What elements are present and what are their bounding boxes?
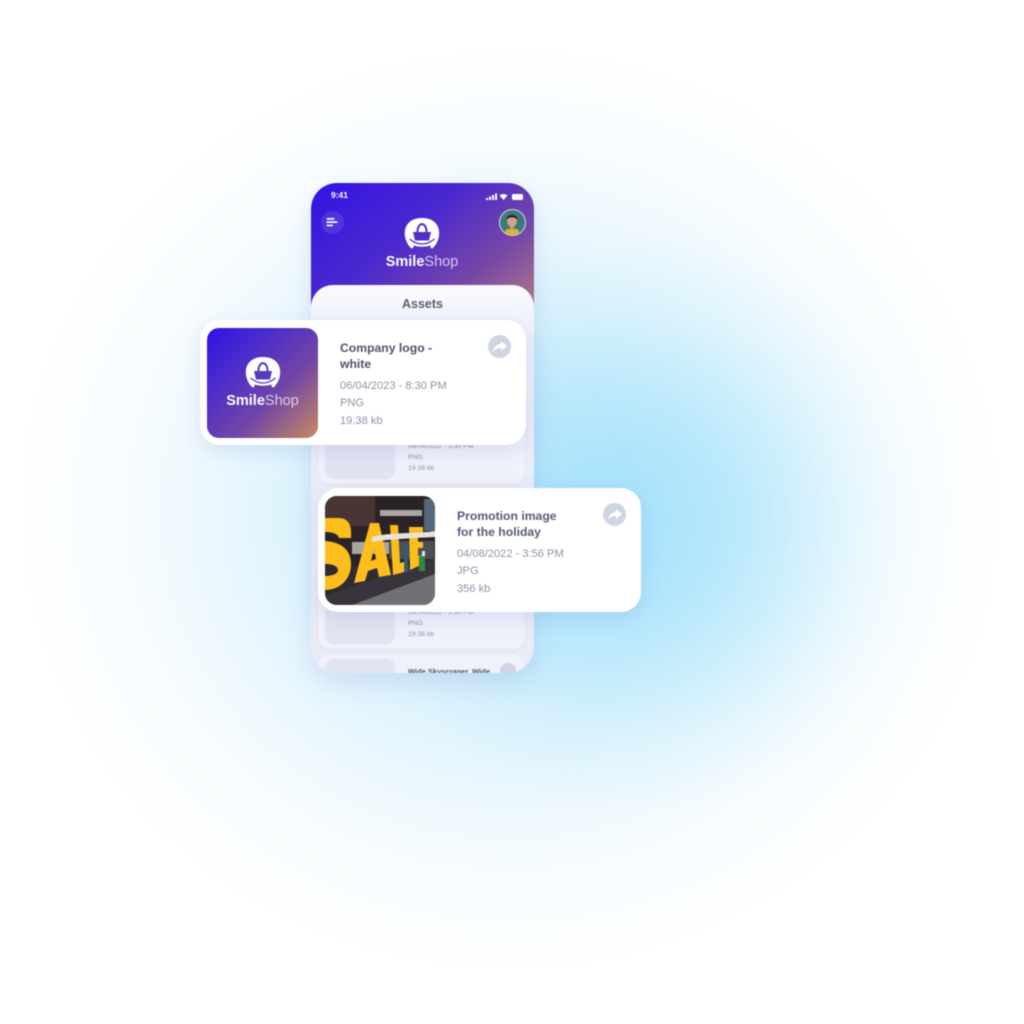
item meta: 04/04/2022 - 3:30 PM: [408, 609, 473, 616]
phone mockup: [311, 183, 534, 673]
card title: [339, 341, 432, 371]
logo wordmark: SmileShop: [386, 254, 458, 270]
card details: 06/04/2023 - 8:30 PM: [340, 380, 447, 392]
item meta: 19.38 kb: [408, 465, 434, 472]
card details: 04/08/2022 - 3:56 PM: [457, 548, 564, 560]
item meta: [408, 609, 474, 638]
share icon: [488, 335, 511, 358]
phone header gradient: [311, 183, 534, 333]
card title: for the holiday: [457, 525, 541, 539]
sale photo: [325, 496, 435, 605]
logo wordmark: SmileShop: [226, 393, 299, 409]
card title: Company logo -: [340, 341, 432, 355]
status bar time: 9:41: [331, 190, 348, 200]
card title: [456, 509, 557, 540]
card details: [340, 380, 447, 426]
status bar icons: [485, 192, 524, 201]
share button: [500, 663, 516, 679]
card details: [456, 548, 564, 594]
logo mark: [245, 356, 281, 388]
card details: 356 kb: [457, 582, 490, 594]
logo thumbnail: [207, 328, 318, 438]
menu button: [321, 211, 344, 234]
card details: 19.38 kb: [340, 414, 383, 426]
sheet heading: Assets: [402, 297, 443, 311]
item meta: PNG: [408, 620, 423, 627]
card details: JPG: [457, 565, 479, 577]
placeholder thumbnail: [325, 573, 395, 644]
share icon: [603, 503, 626, 526]
item meta: [408, 443, 474, 472]
item meta: 04/04/2022 - 3:30 PM: [408, 443, 473, 450]
item meta: 19.38 kb: [408, 631, 434, 638]
placeholder thumbnail: [325, 659, 395, 699]
logo mark: [404, 217, 440, 250]
list item 2: [318, 560, 525, 649]
card title: white: [340, 357, 371, 371]
card: promotion image: [318, 488, 641, 612]
list item 1: [318, 390, 525, 484]
SmileShop logo: [386, 217, 458, 270]
assets sheet: [311, 285, 534, 673]
card: company logo: [200, 320, 526, 445]
list item 3: [318, 654, 525, 694]
placeholder thumbnail: [325, 408, 395, 479]
card title: Promotion image: [457, 509, 557, 523]
avatar: [499, 209, 526, 236]
card details: PNG: [340, 397, 364, 409]
item meta: PNG: [408, 454, 423, 461]
